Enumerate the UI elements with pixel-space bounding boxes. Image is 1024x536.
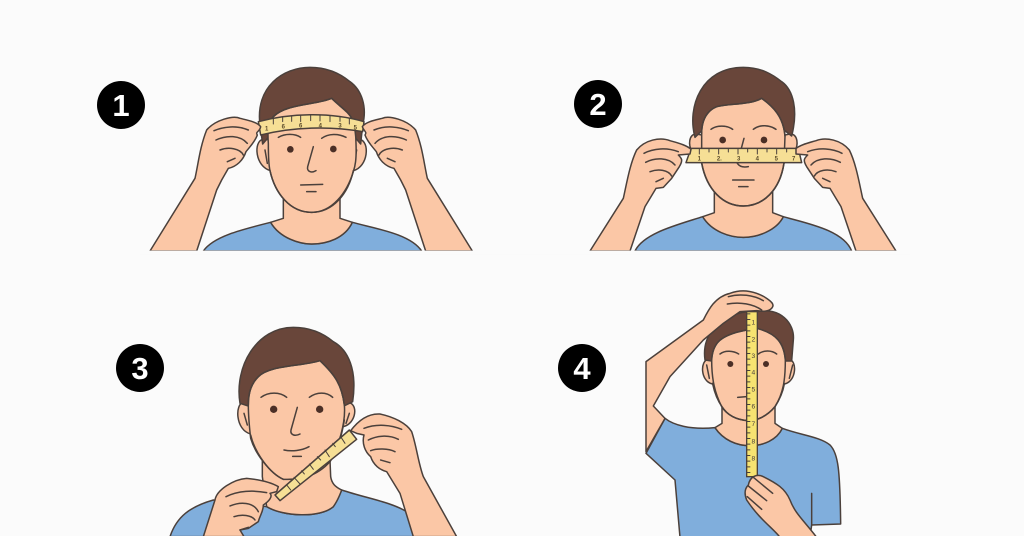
- figure 2: 2.: [717, 156, 722, 162]
- figure 4: 7: [751, 421, 755, 428]
- figure 4: [646, 291, 841, 536]
- figure 1: 6: [299, 123, 303, 129]
- badge 2: 2: [589, 87, 607, 122]
- figure 4: 4: [751, 370, 755, 377]
- panel 3: diagonal cheek measurement: [116, 327, 457, 536]
- figure 1: 6: [282, 125, 286, 131]
- figure 1: [150, 67, 472, 251]
- figure 2: [590, 67, 896, 251]
- badge 3: [116, 344, 164, 392]
- badge 3: 3: [131, 351, 149, 386]
- figure 1: 1: [265, 127, 269, 133]
- figure 4: 8: [751, 438, 755, 445]
- figure 2: 7: [792, 156, 796, 162]
- figure 4: 2: [751, 336, 755, 343]
- figure 3: [170, 327, 457, 536]
- figure 4: 3: [751, 353, 755, 360]
- badge 1: [97, 81, 145, 129]
- badge 2: [574, 80, 622, 128]
- figure 1: 3: [338, 124, 342, 130]
- figure 4: 6: [751, 404, 755, 411]
- figure 1: 5: [354, 125, 358, 131]
- panel 1: forehead measurement: [97, 67, 472, 251]
- figure 2: 4: [756, 156, 760, 162]
- badge 4: 4: [573, 351, 591, 386]
- figure 2: 3: [737, 156, 741, 162]
- badge 1: 1: [112, 88, 130, 123]
- figure 2: 1: [698, 156, 702, 162]
- panel 2: nose-level measurement: [574, 67, 896, 251]
- figure 4: 8: [751, 456, 755, 463]
- badge 4: [558, 344, 606, 392]
- figure 2: 5: [775, 156, 779, 162]
- figure 4: 1: [751, 320, 755, 327]
- figure 4: 5: [751, 386, 755, 393]
- panel 4: vertical face measurement: [558, 291, 841, 536]
- figure 1: 4: [319, 124, 323, 130]
